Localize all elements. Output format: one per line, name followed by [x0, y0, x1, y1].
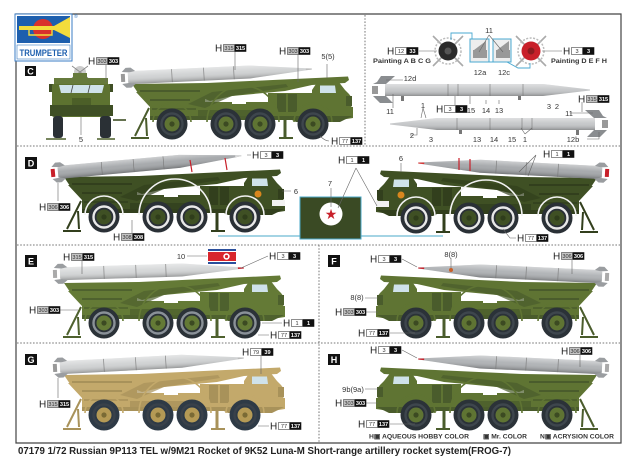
- callouts H: 3: [382, 348, 386, 354]
- callouts details: 3: [429, 135, 433, 144]
- callouts D: [39, 150, 574, 244]
- callouts E: H: [270, 330, 277, 342]
- callouts F: H: [553, 252, 560, 262]
- callouts E: H: [269, 252, 276, 262]
- callouts details: H: [387, 46, 394, 58]
- callouts E: 77: [281, 333, 287, 339]
- callouts G: 77: [281, 424, 287, 430]
- callouts details: 3: [575, 49, 579, 55]
- callouts F: 3: [382, 257, 386, 263]
- callouts D: 7: [328, 179, 332, 188]
- callouts details: 14: [490, 135, 498, 144]
- callouts details: 1: [421, 101, 425, 110]
- callouts H: H: [370, 346, 377, 356]
- callouts C: 5: [79, 135, 83, 144]
- callouts F: 303: [356, 310, 365, 316]
- inset: red star marking: ★: [325, 207, 337, 223]
- panel H: [328, 346, 614, 440]
- callouts E: H: [283, 318, 290, 330]
- callouts H: 3: [394, 348, 397, 354]
- callouts C: 315: [224, 46, 234, 52]
- panel: rocket details: [372, 26, 609, 144]
- callouts D: 1: [567, 152, 570, 158]
- callouts details: H: [436, 104, 443, 116]
- callouts details: 15: [508, 135, 516, 144]
- callouts details: 2: [555, 102, 559, 111]
- callouts H: H: [358, 420, 365, 430]
- callouts details: 3: [448, 107, 452, 113]
- callouts details: 3: [460, 107, 463, 113]
- front view of truck: [46, 66, 126, 139]
- callouts F: 306: [574, 254, 583, 260]
- callouts G: [39, 348, 301, 432]
- callouts H: 303: [344, 401, 354, 407]
- legend: [369, 434, 614, 440]
- callouts D: 306: [48, 205, 58, 211]
- callouts E: 1: [307, 321, 310, 327]
- callouts H: H: [561, 346, 568, 358]
- callouts details: H: [578, 94, 585, 106]
- callouts C: 77: [342, 139, 348, 145]
- callouts D: H: [113, 232, 120, 244]
- callouts details: 12d: [404, 74, 416, 83]
- callouts F: 8(8): [350, 293, 364, 302]
- callouts details: 11: [386, 107, 394, 116]
- callouts F: 77: [369, 331, 375, 337]
- legend: ▣ Mr. COLOR: [483, 434, 527, 440]
- callouts E: H: [29, 306, 36, 316]
- callouts details: 2: [410, 131, 414, 140]
- callouts E: 10: [177, 252, 185, 261]
- callouts G: 315: [60, 402, 69, 408]
- legend: N▣ ACRYSION COLOR: [540, 434, 614, 440]
- panel letter H: H: [331, 355, 337, 365]
- panel G: [25, 348, 301, 432]
- panel letter E: [25, 255, 37, 267]
- callouts F: H: [370, 254, 377, 266]
- callouts E: 1: [295, 321, 299, 327]
- callouts D: 137: [538, 236, 547, 242]
- callouts details: Painting A B C G: [373, 58, 431, 65]
- callouts E: 303: [50, 308, 59, 314]
- callouts details: H: [563, 46, 570, 58]
- upper rocket: [372, 76, 590, 103]
- callouts E: 3: [281, 254, 285, 260]
- callouts C: 137: [352, 139, 361, 145]
- panel D: [25, 146, 610, 244]
- callouts G: H: [242, 348, 249, 358]
- callouts F: 303: [344, 310, 354, 316]
- callouts C: 5(5): [321, 52, 335, 61]
- callouts E: 137: [291, 333, 300, 339]
- callouts G: 39: [264, 350, 271, 356]
- callouts G: H: [270, 422, 277, 432]
- callouts F: H: [335, 308, 342, 318]
- inset 12a: [470, 39, 489, 62]
- callouts C: 303: [109, 59, 118, 65]
- callouts H: 77: [369, 422, 375, 428]
- callouts D: 308: [122, 235, 132, 241]
- panel letter H: [328, 354, 340, 365]
- callouts C: [79, 44, 362, 148]
- legend: H▣ AQUEOUS HOBBY COLOR: [369, 434, 469, 440]
- callouts D: H: [338, 156, 345, 166]
- rocket base red roundel: [516, 36, 546, 66]
- callouts E: 315: [72, 255, 82, 261]
- callouts details: 3: [547, 102, 551, 111]
- callouts H: 306: [582, 349, 591, 355]
- panel letter C: [25, 66, 36, 76]
- callouts E: 315: [84, 255, 93, 261]
- callouts H: 306: [570, 349, 580, 355]
- callouts H: 137: [379, 422, 388, 428]
- callouts details: Painting D E F H: [551, 58, 607, 65]
- logo: Trumpeter: TRUMPETER: [20, 48, 68, 59]
- callouts C: H: [88, 56, 95, 68]
- callouts details: 33: [409, 49, 416, 55]
- callouts details: 15: [467, 106, 475, 115]
- callouts details: 12a: [474, 68, 487, 77]
- panel letter D: D: [28, 158, 35, 168]
- panel letter G: [25, 354, 37, 365]
- panel E: [25, 249, 314, 342]
- callouts D: H: [39, 202, 46, 214]
- callouts details: 12c: [498, 68, 510, 77]
- callouts C: 303: [97, 59, 107, 65]
- callouts D: 77: [528, 236, 534, 242]
- callouts D: 306: [60, 205, 69, 211]
- flag: [208, 249, 236, 264]
- panel letter F: F: [331, 256, 337, 266]
- callouts F: 306: [562, 254, 572, 260]
- callouts C: H: [279, 46, 286, 58]
- callouts D: 308: [134, 235, 143, 241]
- callouts C: H: [331, 136, 338, 148]
- callouts D: H: [252, 150, 259, 162]
- panel letter C: C: [27, 66, 34, 76]
- callouts details: 13: [495, 106, 503, 115]
- callouts F: 3: [394, 257, 397, 263]
- lower rocket: [390, 110, 608, 137]
- callouts F: 8(8): [444, 250, 458, 259]
- rocket and launcher side view: [121, 59, 353, 140]
- connector lines: [451, 33, 530, 68]
- callouts D: H: [517, 234, 524, 244]
- callouts E: H: [63, 252, 70, 264]
- inset: red star marking: [218, 197, 443, 239]
- caption title: 07179 1/72 Russian 9P113 TEL w/9M21 Rocket of 9K52 Luna-M Short-range artillery rocket system(FROG-7): [18, 445, 511, 457]
- callouts H: H: [335, 398, 342, 410]
- callouts details: 11: [485, 26, 493, 35]
- truck D left: [50, 146, 285, 232]
- truck G: [52, 348, 285, 430]
- truck E: [53, 258, 285, 338]
- panel letter D: [25, 157, 37, 169]
- callouts details: 13: [473, 135, 481, 144]
- callouts H: 9b(9a): [342, 385, 364, 394]
- callouts F: [335, 250, 584, 340]
- callouts details: [373, 26, 609, 144]
- callouts details: 315: [587, 97, 597, 103]
- callouts F: 137: [379, 331, 388, 337]
- callouts D: 1: [555, 152, 559, 158]
- callouts details: 12b: [567, 135, 579, 144]
- panel letter E: E: [28, 256, 34, 266]
- callouts details: 12: [398, 49, 404, 55]
- truck F: [376, 258, 609, 338]
- callouts details: 3: [587, 49, 590, 55]
- logo: Trumpeter: [15, 13, 78, 61]
- panel letter G: G: [27, 355, 35, 365]
- callouts G: H: [39, 400, 46, 410]
- callouts E: 3: [293, 254, 296, 260]
- callouts D: 1: [362, 158, 365, 164]
- callouts details: 315: [599, 97, 608, 103]
- callouts D: 3: [264, 153, 268, 159]
- panel C: [25, 44, 362, 148]
- callouts H: [335, 346, 592, 430]
- callouts details: 14: [482, 106, 490, 115]
- rocket base dark roundel: [433, 36, 463, 66]
- logo: Trumpeter: ®: [74, 13, 78, 20]
- callouts H: 303: [356, 401, 365, 407]
- callouts D: 6: [399, 154, 403, 163]
- callouts D: 6: [294, 187, 298, 196]
- callouts C: 303: [288, 49, 298, 55]
- callouts C: 303: [300, 49, 309, 55]
- callouts C: H: [215, 44, 222, 54]
- callouts E: [29, 252, 314, 342]
- panel letter F: [328, 255, 340, 267]
- truck D right: [376, 153, 610, 234]
- callouts D: 1: [350, 158, 354, 164]
- callouts F: H: [358, 328, 365, 340]
- panel F: [328, 250, 609, 340]
- callouts D: 3: [276, 153, 279, 159]
- callouts G: 315: [48, 402, 58, 408]
- callouts E: 303: [38, 308, 48, 314]
- inset 12c: [493, 39, 511, 62]
- callouts G: 137: [291, 424, 300, 430]
- truck H: [376, 349, 609, 430]
- callouts details: 1: [523, 135, 527, 144]
- callouts G: 79: [253, 350, 259, 356]
- callouts details: 11: [565, 109, 573, 118]
- callouts C: 315: [236, 46, 245, 52]
- callouts D: H: [543, 150, 550, 160]
